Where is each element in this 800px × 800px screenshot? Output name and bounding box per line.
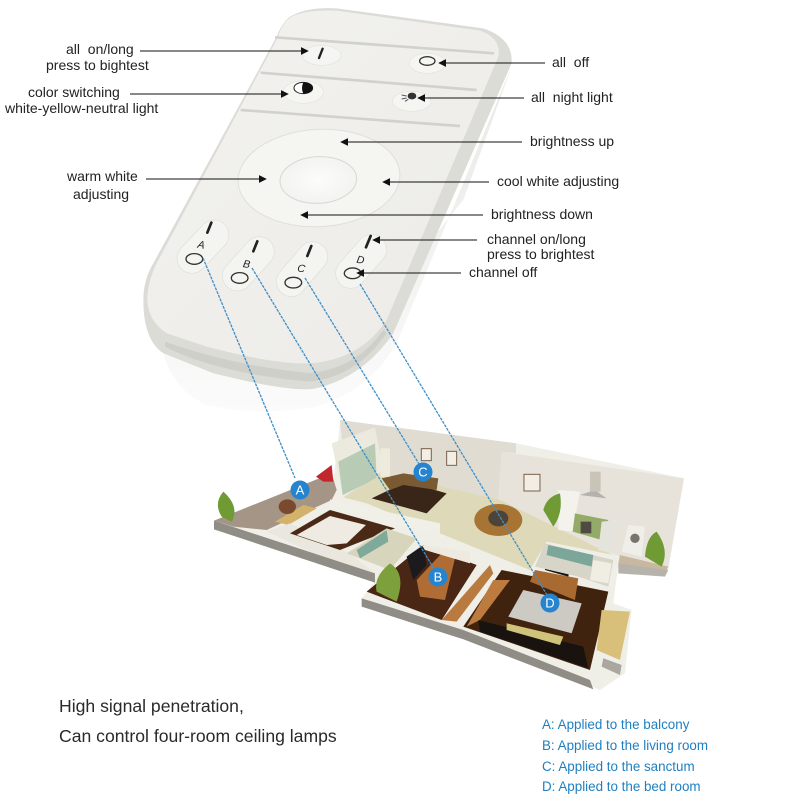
label: brightness down: brightness down [491,206,593,222]
heading text: High signal penetration, [59,696,244,716]
remote control [143,8,512,411]
button: all on [302,45,341,65]
back wall living [340,420,516,500]
marker D: D [545,596,555,610]
control wheel [236,125,402,231]
channel button A [186,223,214,264]
room legend: D: Applied to the bed room [542,779,701,794]
outer base shadow wall [214,423,684,690]
air conditioner [381,448,390,477]
kitchen units [558,472,645,557]
plants [218,492,665,567]
grooves [241,37,494,126]
label: all off: all off [552,54,589,70]
label: color switching: white-yellow-neutral light [4,100,158,116]
marker D [540,594,560,612]
study plant [376,563,400,602]
label: brightness up: brightness up [530,133,614,149]
channel button A: A [196,239,206,252]
bathroom D [535,543,613,587]
channel button D [344,236,372,279]
label: color switching: color switching [28,84,120,100]
back wall kitchen [498,452,684,567]
button: color switching [283,81,323,103]
kitchen right floor [618,555,668,573]
channel button C [285,246,313,288]
channel button B [231,241,259,283]
label: channel on: press to brightest [487,246,594,262]
label: channel off: channel off [469,264,537,280]
label: channel on: channel on/long [487,231,586,247]
front outer wall [214,521,668,689]
label: all on: press to bightest [46,57,149,73]
marker C: C [418,464,428,480]
channel button C: C [296,262,306,276]
label: night light: all night light [531,89,613,105]
marker A: A [296,482,305,498]
remote top face [147,10,499,363]
living floor [343,473,613,570]
channel button B: B [242,258,251,271]
room legend: C: Applied to the sanctum [542,759,695,774]
room legend: A: Applied to the balcony [542,717,690,732]
wall pictures [421,449,540,491]
marker B [428,568,448,586]
label: warm white: adjusting [73,186,129,202]
remote underside shadow [163,67,512,411]
bathroom [347,528,417,570]
balcony A room [214,473,337,530]
center button [279,155,358,205]
dining table [474,504,522,536]
rim shadow on front edge [165,330,387,382]
marker B: B [434,570,442,584]
master bedroom left [290,510,395,550]
signal lines [203,258,550,600]
marker A [290,480,310,500]
room legend [542,717,708,794]
inner low wall [330,499,440,535]
channel button D: D [356,254,366,267]
room legend: B: Applied to the living room [542,738,708,753]
heading text: Can control four-room ceiling lamps [59,726,337,746]
rug and sofa [372,482,447,513]
button: night light [392,91,431,111]
bedroom D floor [463,570,608,670]
arrows [130,51,545,273]
balcony D [597,610,630,660]
glass door wall [332,427,383,497]
study floor [367,545,477,620]
floor plan [214,420,684,690]
label: warm white: warm white [66,168,138,184]
remote rim [143,8,512,389]
label: all on: all on/long [66,41,134,57]
marker C [414,462,432,482]
button: all off [409,53,445,73]
label: cool white: cool white adjusting [497,173,619,189]
